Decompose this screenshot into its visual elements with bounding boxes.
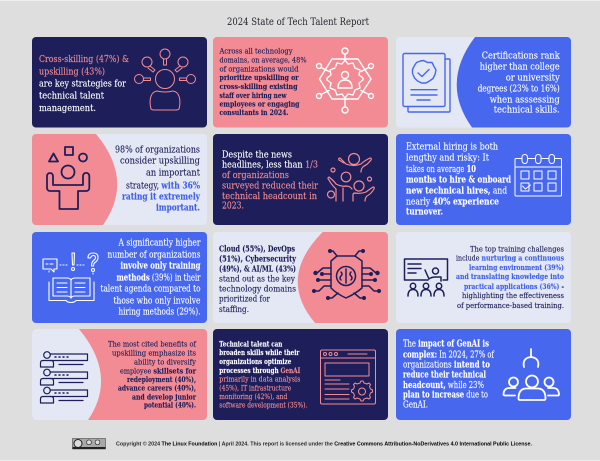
text: news headlines: 2023. (222, 201, 244, 212)
text: impact of GenAI: GenAI. (403, 400, 428, 411)
text: news headlines: headlines, less than 1/3 (222, 160, 318, 171)
panel: external hiring (396, 134, 571, 225)
text: external hiring: months to hire & onboard (406, 174, 511, 185)
text: news headlines: technical headcount in (222, 191, 317, 202)
text: training methods: number of organizations (108, 249, 201, 260)
text: cross-skilling: Cross-skilling (47%) & (39, 54, 129, 65)
text: external hiring: takes on average 10 (406, 164, 476, 175)
text: training challenges: learning environment (39%) (469, 263, 564, 272)
icon: open book with question (43, 253, 98, 302)
text: certifications: when asssessing (490, 95, 560, 106)
text: upskilling benefits: redeployment (40%), (127, 375, 196, 384)
icon: browser window with gear (320, 350, 376, 404)
text: GenAI processes: primarily in data analysis (219, 375, 300, 384)
icon: employee list (40, 352, 88, 403)
text: news headlines: Despite the news (222, 150, 292, 161)
text: certifications: degrees (23% to 16%) (478, 84, 560, 95)
text: news headlines: of organizations (222, 170, 289, 181)
text: training methods: involve only training (120, 261, 201, 272)
text: training challenges: of performance-based training. (457, 301, 564, 310)
panel: impact of GenAI (396, 329, 571, 420)
text: certifications: technical skills. (494, 105, 560, 116)
text: external hiring: nearly 40% experience (406, 197, 499, 208)
text: prioritize upskilling: Across all technology (219, 46, 293, 56)
text: prioritize upskilling: of organizations would (220, 64, 299, 74)
text: cross-skilling: technical talent (39, 90, 104, 102)
text: GenAI processes: processes through GenAI (219, 366, 301, 375)
text: upskilling benefits: ability to diversify (134, 357, 197, 366)
text: training challenges: include nurturing a continuous (456, 254, 564, 263)
text: upskilling benefits: employee skillsets for (120, 366, 197, 375)
text: impact of GenAI: plan to increase due to (403, 390, 488, 401)
text: technology domains: (49%), & AI/ML (43%) (219, 263, 296, 274)
panel: GenAI processes (213, 329, 388, 420)
panel: training methods (32, 232, 207, 323)
icon: person juggling shapes (47, 147, 89, 209)
text: training methods: methods (39%) in their (116, 272, 201, 283)
text: impact of GenAI: organizations intend to (403, 360, 490, 371)
text: upskilling benefits (108, 340, 197, 410)
panel: cross-skilling (32, 37, 207, 128)
text: news headlines: surveyed reduced their (222, 180, 318, 191)
icon: team with network arc (504, 349, 559, 400)
text: technology domains: Cloud (55%), DevOps (219, 243, 295, 254)
text: certifications: Certifications rank (482, 50, 560, 62)
text: 98% of organizations: strategy, with 36% (126, 181, 200, 192)
text: training methods: hiring methods (29%). (118, 306, 200, 317)
text: training methods (100, 238, 201, 317)
text: certifications (478, 50, 560, 116)
text: external hiring: External hiring is both (406, 142, 498, 153)
text: prioritize upskilling: employees or engaging (220, 100, 300, 108)
text: GenAI processes: Technical talent can (219, 340, 283, 349)
text: prioritize upskilling: staff over hiring new (220, 91, 287, 100)
text: technology domains: prioritized for (219, 295, 271, 305)
text: cross-skilling: management. (39, 103, 96, 114)
text: training challenges: practical applications (36%) - (464, 282, 564, 291)
icon: classroom teacher (404, 259, 448, 296)
text: GenAI processes: (45%), IT infrastructure (219, 384, 292, 393)
text: external hiring: new technical hires, and (406, 186, 507, 197)
text: upskilling benefits: The most cited benefits of (108, 340, 197, 349)
text: technology domains: stand out as the key (219, 274, 295, 284)
text: impact of GenAI: The impact of GenAI is (403, 339, 489, 350)
text: impact of GenAI (403, 339, 494, 411)
panel: prioritize upskilling (213, 37, 388, 128)
text: training challenges: highlighting the effectiveness (462, 291, 564, 300)
text: external hiring (406, 142, 511, 218)
text: technology domains (219, 243, 297, 315)
text: copyright line: Copyright © 2024 The Linux Foundation | April 2024. This report is licensed under the Creative Commons Attribution-NoDerivatives 4.0 International Public License. (116, 440, 533, 448)
panel: certifications (396, 37, 571, 128)
panel: technology domains (213, 232, 388, 323)
text: technology domains: staffing. (219, 305, 249, 315)
icon: calendar (515, 154, 562, 196)
text: impact of GenAI: headcount, while 23% (403, 380, 484, 391)
text: upskilling benefits: upskilling emphasize its (112, 349, 196, 358)
text: 98% of organizations: consider upskilling (120, 156, 200, 167)
text: impact of GenAI: reduce their technical (403, 370, 486, 381)
text: upskilling benefits: advance careers (40%), (118, 384, 196, 393)
text: cross-skilling (39, 54, 129, 114)
text: technology domains: (51%), Cybersecurity (219, 253, 297, 264)
panel: news headlines (213, 134, 388, 225)
icon: certificate document (403, 54, 450, 112)
text: training challenges (456, 244, 564, 310)
text: external hiring: turnover. (406, 207, 443, 218)
text: 98% of organizations: an important (146, 168, 200, 179)
text: GenAI processes: monitoring (42%), and (219, 392, 287, 401)
text: certifications: or university (506, 73, 560, 84)
text: training methods: those who only involve (114, 295, 201, 306)
text: training challenges: and translating knowledge into (456, 272, 564, 281)
text: 98% of organizations: rating it extremely (122, 192, 200, 203)
text: 98% of organizations (115, 145, 200, 213)
text: GenAI processes: broaden skills while their (219, 348, 300, 357)
panel: 98% of organizations (32, 134, 207, 225)
text: 98% of organizations: 98% of organizations (115, 145, 200, 156)
title: 2024 State of Tech Talent Report (227, 17, 369, 28)
text: GenAI processes: organizations optimize (219, 357, 291, 366)
panel: training challenges (396, 232, 571, 323)
text: prioritize upskilling: consultants in 2024. (220, 108, 288, 117)
text: training methods: talent agenda compared to (100, 284, 201, 295)
text: prioritize upskilling: prioritize upskilling or (220, 73, 299, 82)
panel: upskilling benefits (32, 329, 207, 420)
text: certifications: higher than college (480, 62, 560, 72)
text: GenAI processes (219, 340, 307, 409)
icon: brain shield circuit (312, 249, 381, 300)
text: 98% of organizations: important. (156, 202, 200, 213)
text: prioritize upskilling (219, 46, 306, 117)
icon: creative commons badge (72, 438, 106, 449)
text: prioritize upskilling: domains, on average, 48% (220, 56, 306, 64)
text: news headlines (222, 150, 318, 212)
text: prioritize upskilling: cross-skilling existing (220, 82, 298, 91)
text: upskilling benefits: potential (40%). (144, 401, 196, 410)
text: impact of GenAI: complex: In 2024, 27% of (403, 349, 494, 360)
text: technology domains: technology domains (219, 285, 296, 295)
icon: person with ideas (134, 49, 196, 110)
text: upskilling benefits: and develop junior (132, 392, 197, 401)
text: cross-skilling: are key strategies for (39, 78, 126, 90)
icon: three cheering people (328, 154, 374, 201)
text: cross-skilling: upskilling (43%) (39, 66, 105, 78)
footer (72, 438, 533, 449)
icon: gear hexagon person (316, 48, 374, 113)
text: external hiring: lengthy and risky: It (406, 153, 489, 164)
text: training challenges: The top training challenges (470, 244, 564, 253)
text: GenAI processes: software development (35%). (219, 400, 307, 409)
text: training methods: A significantly higher (118, 238, 201, 249)
